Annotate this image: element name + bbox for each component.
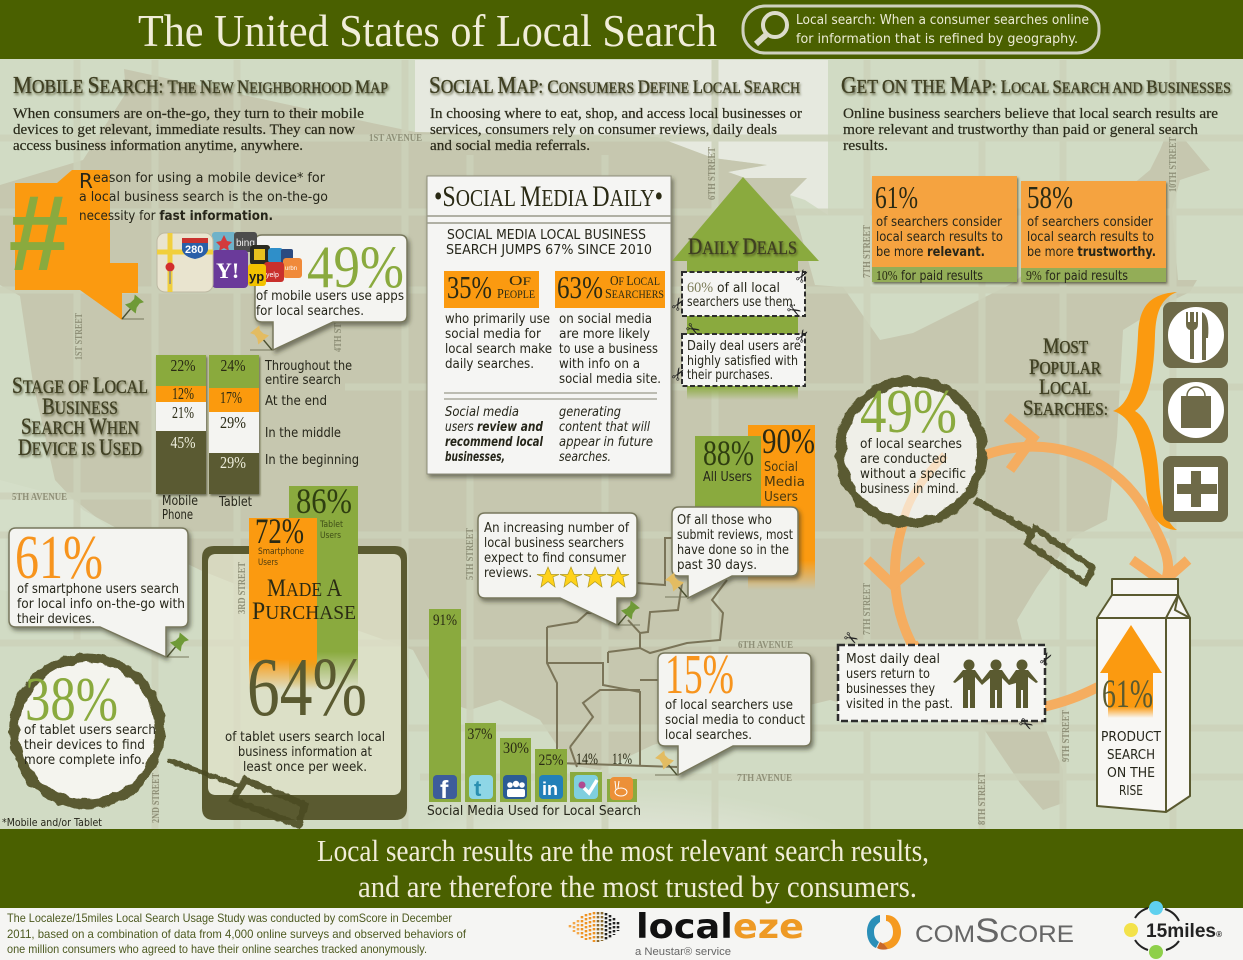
article column one: local search make [445,342,552,357]
chart: 88% vs 90%: Users [764,490,798,505]
heading: made a purchase: PURCHASE [252,598,356,625]
number one reason tag: a local business search is the on-the-go [79,190,328,205]
magnifier: 49% local searches [840,378,1093,583]
icon: linkedin [539,775,563,799]
title: The United States of Local Search [138,6,717,56]
street labels [12,133,1179,825]
arrow: rising [1100,625,1162,718]
chart caption: Social Media Used for Local Search [427,804,641,819]
bars [429,609,637,802]
italic note column two: searches. [559,450,611,465]
icon: foursquare [574,775,598,799]
heading: stage of local business search [12,373,148,460]
coupon: returning customers: users return to [846,667,930,682]
article column two: with info on a [559,357,640,372]
heading: most popular local searches: POPULAR [1029,354,1101,379]
callout: 61% smartphone: 61% [15,524,103,592]
header band [0,0,1243,59]
bar legend labels [162,359,359,523]
chart: 88% vs 90%: 90% [762,421,815,461]
coupon: 60% of searchers: ✂ [791,265,815,288]
card: 61% relevant: 10% for paid results [876,269,983,284]
heading: made a purchase [252,575,356,625]
article column two: are more likely [559,327,650,342]
number one reason tag: eason for using a mobile device* for [93,171,326,186]
article column two [559,312,661,387]
bar values: 17% [220,388,242,407]
intro text [843,106,1218,154]
stat: 64%: 64% [247,641,367,734]
stat: 35% of people: PEOPLE [497,287,535,302]
magnifier: 38% tablet [14,658,305,825]
bar values: 25% [538,752,564,769]
icon: mobile app icons: yp [249,269,264,284]
conclusion band [0,829,1243,908]
coupon: daily deal satisfaction: Daily deal users are [687,339,801,354]
arrows: search cycle [867,417,1188,707]
heading: stage of local business search: STAGE OF LOCAL [12,373,148,398]
italic note column one: users review and [445,420,544,435]
coupon: returning customers: visited in the past. [846,697,953,712]
magnifier: 38% tablet: their devices to find [24,738,145,753]
bar values: 45% [170,433,196,452]
icon: four stars [537,567,629,587]
callout: 61% smartphone: for local info on-the-go with [17,597,185,612]
street labels: 6TH STREET [707,147,718,200]
bar legend labels: entire search [265,373,341,388]
number one reason tag [7,169,328,323]
callout: 15% social media [654,644,811,779]
callout: 49% apps: of mobile users use apps [256,289,404,304]
article column two: on social media [559,312,652,327]
stacked bar chart: stage of search [156,355,359,523]
icon: mobile app icons: urbn [285,266,297,272]
bar values: 37% [468,726,492,743]
heading: most popular local searches: LOCAL [1039,374,1091,399]
intro text: services, consumers rely on consumer reviews, daily deals [430,122,777,138]
magnifier: 49% local searches: business in mind. [860,482,959,497]
street labels: 7TH AVENUE [737,773,792,784]
bar values: 21% [172,403,194,422]
stat: 63% of local searchers: 63% [557,269,603,305]
chart: 88% vs 90%: Social [764,460,798,475]
definition text [796,13,1089,47]
heading: stage of local business search: BUSINESS [42,394,118,419]
panel: mobile search [2,73,407,829]
bar legend labels: Tablet [218,495,252,510]
carton label [1101,730,1161,799]
coupon: daily deal satisfaction: ✂ [667,363,691,386]
coupon: daily deal satisfaction: ✂ [791,325,815,348]
callout: 49% apps: for local searches. [256,304,364,319]
bar: mobile phone [156,355,206,494]
bar legend labels: Phone [162,508,193,523]
magnifier: 49% local searches: without a specific [860,467,966,482]
bar: smartphone users 72%: Users [258,558,278,568]
coupon: 60% of searchers: ✂ [782,299,805,323]
intro text [13,106,364,154]
icon: linkedin: in [542,779,558,799]
coupon: 60% of searchers [667,265,815,323]
coupon: 60% of searchers: ✂ [667,293,691,316]
heading: most popular local searches: MOST [1043,333,1088,358]
italic note column one: businesses, [445,450,505,465]
bar: smartphone users 72%: 72% [255,511,304,551]
arrow: daily deals: DAILY DEALS [688,234,797,259]
card: 58% trustworthy: of searchers consider [1027,215,1154,230]
icon: three people [953,660,1038,708]
bar chart: social media used for local search [427,609,641,819]
icon: mobile app icons: 280 [185,244,203,256]
icon: shopping bag [1163,378,1228,443]
icon: twitter: t [474,776,482,801]
article column two: social media site. [559,372,661,387]
street labels: 5TH STREET [465,528,476,580]
callout: 15% social media: local searches. [665,728,752,743]
article column one: who primarily use [445,312,550,327]
methodology text: The Localeze/15miles Local Search Usage Study was conducted by comScore in December [7,911,452,925]
carton label: SEARCH [1107,748,1155,763]
coupon: returning customers: ✂ [840,627,862,651]
article column one: daily searches. [445,357,534,372]
bar legend labels: Throughout the [264,359,352,374]
street labels: 6TH AVENUE [738,640,793,651]
newspaper headline: SEARCH JUMPS 67% SINCE 2010 [446,243,652,258]
callout: recent reviews: Of all those who [677,513,772,528]
heading: get on the map: GET ON THE MAP: LOCAL SEARCH AND BUSINESSES [841,73,1231,99]
bar values: 12% [172,384,194,403]
logo: localeze [570,907,804,958]
bar legend labels: Mobile [162,494,198,509]
panel: get on the map [838,73,1231,812]
italic note column two: generating [559,405,621,420]
card: 58% trustworthy [1021,179,1166,284]
carton label: PRODUCT [1101,730,1161,745]
milk carton: product search [1097,579,1190,812]
street labels: 4TH STREET [333,300,344,352]
callout: 15% social media: of local searchers use [665,698,793,713]
stat: 35% of people: O F [509,274,531,289]
logo: localeze: localeze [636,907,804,947]
bar values: 14% [576,751,598,768]
callout: consumer reviews: expect to find consumer [484,551,627,566]
coupon: daily deal satisfaction [667,318,815,386]
definition text: for information that is refined by geography. [796,32,1078,47]
card: 61% relevant: of searchers consider [876,215,1003,230]
heading: stage of local business search: SEARCH WHEN [21,414,139,439]
heading: stage of local business search: DEVICE IS USED [18,435,142,460]
article column two: to use a business [559,342,658,357]
methodology text: 2011, based on a combination of data from 4,000 online surveys and observed behaviors of [7,927,467,941]
callout: recent reviews: past 30 days. [677,558,757,573]
panel: social map [427,73,819,819]
intro text: access business information anytime, anywhere. [13,138,303,154]
bar legend labels: In the beginning [265,453,359,468]
callout: consumer reviews: An increasing number of [484,521,629,536]
newspaper headline [446,228,652,258]
card: 58% trustworthy: be more trustworthy. [1027,245,1156,260]
search definition box [743,6,1099,53]
card: 58% trustworthy: 9% for paid results [1026,269,1128,284]
bar values: 11% [612,751,632,768]
bar legend labels: At the end [265,394,327,409]
brace [1113,292,1177,530]
icon: myspace [503,775,527,799]
callout: 61% smartphone: of smartphone users search [17,582,179,597]
stat: 35% of people: 35% [447,269,492,305]
street labels: 5TH AVENUE [12,492,67,503]
methodology text: one million consumers who agreed to have their online searches tracked anonymously. [7,942,427,956]
bar: tablet users 86%: Users [320,531,341,541]
bar values [170,356,246,472]
callout: recent reviews [664,507,798,601]
italic note column one [445,405,544,465]
intro text: devices to get relevant, immediate results. They can now [13,122,356,138]
milk carton: product search: 61% [1102,671,1153,716]
italic note column one: Social media [445,405,519,420]
heading: most popular local searches [1023,333,1108,420]
newspaper headline: SOCIAL MEDIA LOCAL BUSINESS [447,228,646,243]
callout: 49% apps [249,234,407,354]
coupon: returning customers: ✂ [1014,713,1037,737]
icon: facebook: f [440,776,449,804]
magnifier: 49% local searches: are conducted [860,452,947,467]
callout: 15% social media: 15% [665,644,734,706]
conclusion band: Local search results are the most relevant search results, [317,833,929,868]
panel: made a purchase tablet [202,481,407,820]
bar: smartphone users 72%: Smartphone [258,547,304,557]
street labels: 8TH STREET [977,773,988,825]
bar: tablet users 86% [289,481,358,688]
heading: most popular local searches: SEARCHES: [1023,395,1108,420]
street labels: 7TH STREET [862,583,873,635]
icon: medical cross [1163,456,1228,522]
carton label: ON THE [1107,766,1155,781]
coupon: daily deal satisfaction: highly satisfied with [687,354,798,369]
tablet frame [202,546,407,820]
newspaper masthead: •SOCIAL MEDIA DAILY• [434,180,663,213]
stat description: business information at [238,745,372,760]
logo: localeze: a Neustar® service [635,946,731,958]
heading: made a purchase: MADE A [267,575,342,602]
icon: twitter [469,775,493,801]
callout: recent reviews: have done so in the [677,543,789,558]
coupon: returning customers [838,627,1059,737]
coupon: daily deal satisfaction: their purchases. [687,368,773,383]
conclusion band: and are therefore the most trusted by consumers. [358,869,917,904]
newspaper: social media daily [427,176,671,474]
street labels: 10TH STREET [1168,137,1179,192]
bar values: 29% [220,453,246,472]
chart: 88% vs 90%: Media [764,475,805,490]
stat description: least once per week. [243,760,367,775]
stat: 35% of people [444,269,539,308]
magnifier: 49% local searches: of local searches [860,437,962,452]
card: 61% relevant: be more relevant. [876,245,985,260]
definition text: Local search: When a consumer searches online [796,13,1089,28]
card: 58% trustworthy: local search results to [1027,230,1154,245]
coupon: 60% of searchers: searchers use them. [687,295,796,310]
street labels: 7TH STREET [862,225,873,278]
state borders map [547,538,727,767]
stat description [225,730,385,775]
carton label: RISE [1119,784,1143,799]
coupon: returning customers: Most daily deal [846,652,940,667]
street labels: 2ND STREET [151,773,162,823]
icon: magnifying glass [756,13,787,44]
icon: mobile app icons [157,232,302,292]
number one reason tag: # [7,172,67,293]
heading: social map: SOCIAL MAP: CONSUMERS DEFINE LOCAL SEARCH [429,73,800,99]
italic note column one: recommend local [445,435,543,450]
bar values [433,612,632,769]
icon: restaurant [1163,302,1228,368]
intro text: more relevant and trustworthy than paid or general search [843,122,1199,138]
bar values: 91% [433,612,457,629]
footer [0,901,1243,960]
bar values: 30% [503,740,529,757]
italic note column two: content that will [559,420,650,435]
number one reason tag: R [79,169,93,193]
callout: consumer reviews: local business searchers [484,536,624,551]
article column one: social media for [445,327,542,342]
bar: tablet users 86%: Tablet [319,520,344,530]
icon: mobile app icons: bing [236,238,255,249]
italic note column two [559,405,653,465]
bar: tablet [209,355,259,494]
icon: orange rabbit app [610,777,633,800]
magnifier: 38% tablet: of tablet users search [24,723,156,738]
number one reason tag: necessity for fast information. [79,209,273,224]
street labels: 9TH STREET [1061,710,1072,762]
italic note column two: appear in future [559,435,653,450]
logo: comscore: comScore [915,912,1074,950]
magnifier: 49% local searches: 49% [860,378,957,446]
logo: 15miles: 15miles® [1146,921,1222,942]
callout: 61% smartphone: their devices. [17,612,95,627]
card: 61% relevant: local search results to [876,230,1003,245]
logo: 15miles [1124,901,1222,959]
callout: consumer reviews [478,513,641,629]
coupon: daily deal satisfaction: ✂ [682,318,704,342]
chart: 88% vs 90%: All Users [703,470,752,485]
bar values: 24% [220,356,246,375]
stat: 63% of local searchers [555,269,665,308]
coupon: 60% of searchers: 60% of all local [687,280,780,296]
icon: mobile app icons: yelp [266,272,279,279]
intro text [430,106,802,154]
callout: 15% social media: social media to conduct [665,713,805,728]
bar values: 29% [220,413,246,432]
card: 61% relevant: 61% [875,179,918,215]
callout: 49% apps: 49% [307,234,404,300]
street labels: 1ST AVENUE [369,133,422,144]
callout: recent reviews: submit reviews, most [677,528,793,543]
stat description: of tablet users search local [225,730,385,745]
icon: facebook [433,775,457,804]
stat: 63% of local searchers: SEARCHERS [605,287,664,302]
coupon: returning customers: ✂ [1035,648,1059,670]
callout: 61% smartphone [9,524,190,661]
magnifier: 38% tablet: 38% [25,666,118,734]
bar values: 22% [170,356,196,375]
arrow: daily deals [667,177,819,400]
magnifier: 38% tablet: more complete info. [24,753,145,768]
card: 58% trustworthy: 58% [1027,179,1073,215]
methodology text [7,911,467,956]
intro text: results. [843,138,888,154]
bar legend labels: In the middle [265,426,341,441]
bar: smartphone users 72% [249,511,317,690]
article column one [445,312,552,372]
callout: consumer reviews: reviews. [484,566,532,581]
intro text: and social media referrals. [430,138,590,154]
stat: 63% of local searchers: OF LOCAL [610,274,660,289]
coupon: returning customers: businesses they [846,682,935,697]
card: 61% relevant [872,176,1017,284]
street labels: 1ST STREET [74,313,85,360]
intro text: When consumers are on-the-go, they turn to their mobile [13,106,364,122]
chart: 88% vs 90%: 88% [703,433,754,473]
footnote: *Mobile and/or Tablet [2,817,102,829]
intro text: Online business searchers believe that local search results are [843,106,1218,122]
heading: mobile search: MOBILE SEARCH: THE NEW NEIGHBORHOOD MAP [13,73,388,99]
street label: 3rd street: 3RD STREET [237,562,248,614]
chart: 88% vs 90% [695,421,815,590]
icon: mobile app icons: Y! [216,258,239,283]
bar: tablet users 86%: 86% [296,481,352,521]
intro text: In choosing where to eat, shop, and access local businesses or [430,106,802,122]
